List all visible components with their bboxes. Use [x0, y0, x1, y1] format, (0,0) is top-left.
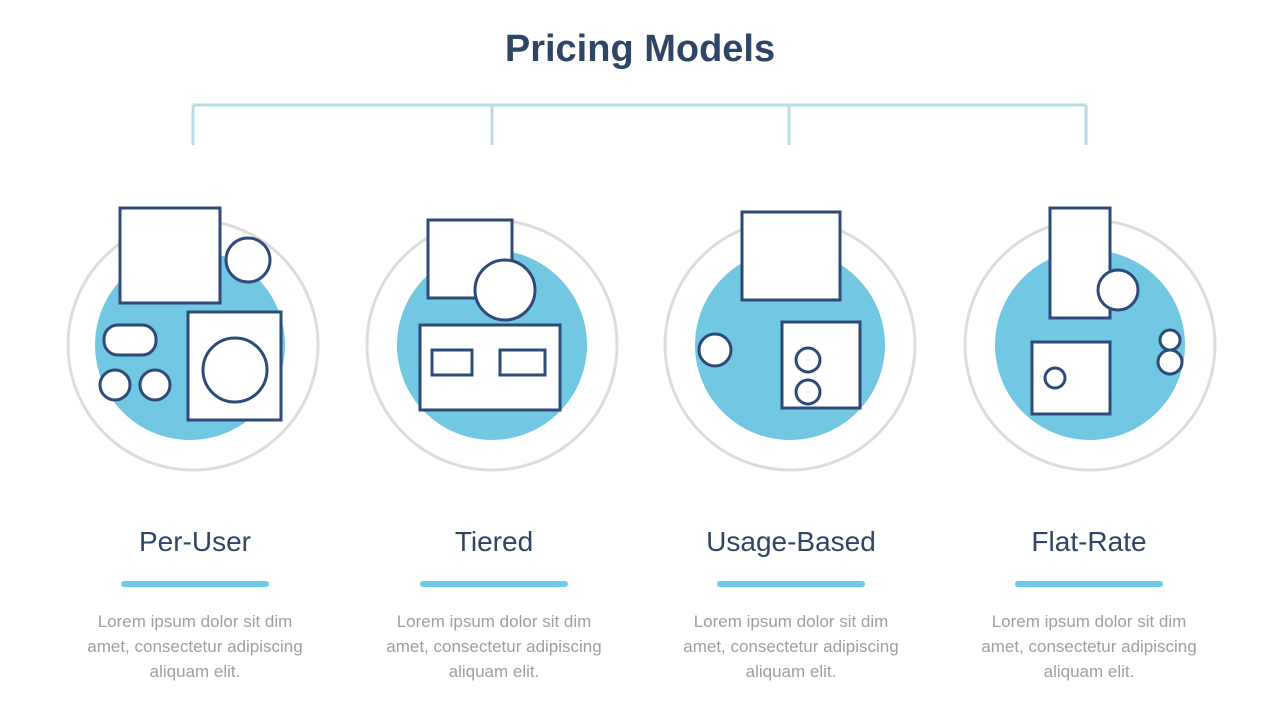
icon: flat-rate	[965, 208, 1215, 470]
column: Flat-Rate: aliquam elit.	[1044, 662, 1134, 681]
column: Usage-Based: Lorem ipsum dolor sit dim	[694, 612, 888, 631]
icon: per-user	[68, 208, 318, 470]
column: Flat-Rate: Lorem ipsum dolor sit dim	[992, 612, 1186, 631]
column: Per-User: Lorem ipsum dolor sit dim	[98, 612, 292, 631]
column: Per-User: Per-User	[139, 526, 251, 557]
column: Tiered: aliquam elit.	[449, 662, 539, 681]
column: Tiered: amet, consectetur adipiscing	[386, 637, 602, 656]
column: Usage-Based: amet, consectetur adipiscing	[683, 637, 899, 656]
column: Flat-Rate	[981, 526, 1197, 681]
column: Per-User: aliquam elit.	[150, 662, 240, 681]
column: Per-User: amet, consectetur adipiscing	[87, 637, 303, 656]
column: Per-User	[87, 526, 303, 681]
column: Usage-Based: aliquam elit.	[746, 662, 836, 681]
column: Tiered: Lorem ipsum dolor sit dim	[397, 612, 591, 631]
icon: usage-based	[665, 212, 915, 470]
column: Usage-Based	[683, 526, 899, 681]
column: Flat-Rate: Flat-Rate	[1031, 526, 1147, 557]
column: Tiered	[386, 526, 602, 681]
icon: tiered	[367, 220, 617, 470]
title: Pricing Models	[505, 28, 775, 70]
column: Tiered: Tiered	[455, 526, 533, 557]
column: Usage-Based: Usage-Based	[706, 526, 876, 557]
column: Flat-Rate: amet, consectetur adipiscing	[981, 637, 1197, 656]
